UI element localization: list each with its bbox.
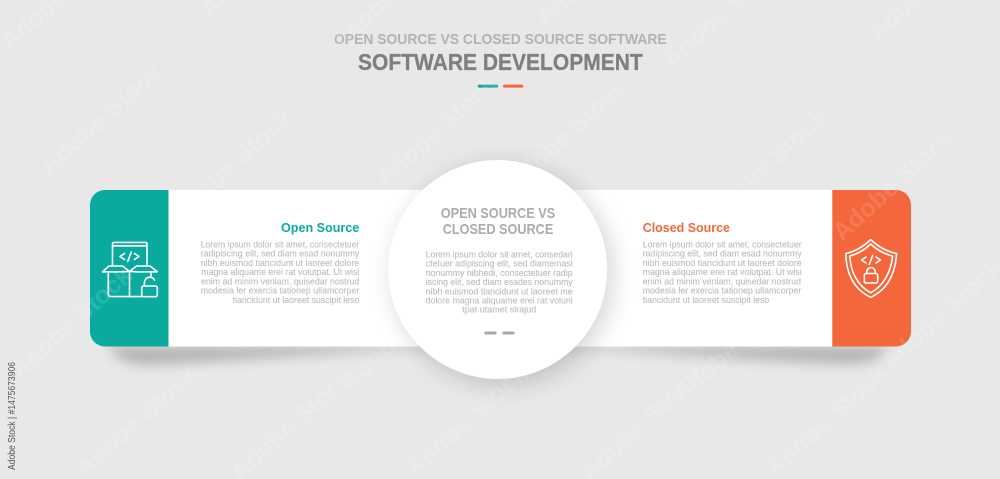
icon: shield with code and padlock: [846, 240, 897, 297]
watermark pattern: Adobe Stock: [700, 103, 833, 226]
body text: closed source: Lorem ipsum dolor sit amet, consectetuer: [643, 240, 802, 250]
body text: open source: magna aliquame erei rat volutpat. Ut wisi: [201, 267, 359, 277]
circle: [388, 160, 607, 379]
body text: center: ctetuer adipiscing elit, sed diamemasi: [426, 259, 573, 269]
body text: open source: [201, 240, 360, 305]
body text: closed source: magna aliquame erei rat volutpat. Ut wisi: [643, 267, 802, 277]
body text: closed source: radipiscing elit, sed diam esad nonummy: [643, 249, 802, 259]
body text: open source: enim ad minim veniam, quisedar nostrud: [201, 276, 359, 286]
watermark pattern: Adobe Stock: [207, 229, 340, 352]
main heading: SOFTWARE DEVELOPMENT: [358, 49, 643, 75]
watermark pattern: Adobe Stock: [5, 261, 138, 384]
heading: center: CLOSED SOURCE: [443, 221, 553, 238]
body text: open source: modesia ler exercia tationep ullamcorper: [201, 286, 359, 296]
watermark pattern: Adobe Stock: [760, 359, 893, 479]
body text: center: tpat utamet sirajud: [462, 305, 536, 315]
watermark pattern: Adobe Stock: [35, 57, 168, 180]
panel body: [160, 190, 840, 346]
stock reference label: Adobe Stock | #1475673906: [6, 362, 18, 470]
panel: open source text: [201, 220, 360, 305]
body text: closed source: nibh euismod tiancidunt ut laoreet dolore: [643, 258, 802, 268]
body text: closed source: tiancidunt ut laoreet suscipit leso: [643, 295, 769, 305]
watermark pattern: Adobe Stock: [400, 359, 533, 479]
orange side block: [832, 190, 911, 346]
icon: open box with code and unlocked padlock: [102, 242, 157, 297]
watermark pattern: Adobe Stock: [537, 236, 670, 359]
body text: center: [426, 250, 573, 315]
body text: center: dolore magna aliquame erei rat voluni: [426, 295, 573, 305]
body text: closed source: modesia ler exercia tationep ullamcorper: [643, 286, 801, 296]
teal side block: [90, 190, 168, 346]
subtitle: OPEN SOURCE VS CLOSED SOURCE SOFTWARE: [334, 31, 667, 48]
body text: open source: tiancidunt ut laoreet suscipit leso: [233, 295, 359, 305]
watermark pattern: Adobe Stock: [667, 285, 800, 408]
heading: center: OPEN SOURCE VS: [441, 205, 555, 222]
watermark pattern: Adobe Stock: [335, 273, 468, 396]
heading: closed source: Closed Source: [643, 220, 730, 235]
watermark pattern: Adobe Stock: [500, 73, 633, 196]
watermark pattern: Adobe Stock: [70, 359, 203, 479]
panel: comparison band: [90, 190, 911, 346]
heading: center: [441, 205, 555, 238]
title block: [334, 31, 667, 88]
dash marker: left: [484, 332, 497, 334]
heading: open source: Open Source: [281, 220, 359, 235]
body text: closed source: enim ad minim veniam, quisedar nostrud: [643, 276, 801, 286]
body text: center: nonummy nibhedi, consectetuer radip: [426, 268, 573, 278]
panel: center circle: [388, 160, 607, 379]
watermark pattern: Adobe Stock: [165, 103, 298, 226]
body text: center: Lorem ipsum dolor sit amet, consedari: [426, 250, 573, 260]
circle shadow: [393, 165, 613, 385]
watermark pattern: Adobe Stock: [827, 123, 960, 246]
body text: open source: nibh euismod tiancidunt ut laoreet dolore: [201, 258, 359, 268]
accent bar: teal: [478, 85, 498, 88]
panel: closed source text: [643, 220, 802, 305]
accent bar: orange: [503, 85, 523, 88]
body text: center: nibh euismod tiancidunt ut laoreet me: [426, 286, 573, 296]
dash marker: right: [502, 332, 515, 334]
panel shadow: [108, 346, 888, 365]
watermark pattern: Adobe Stock: [370, 69, 503, 192]
body text: open source: Lorem ipsum dolor sit amet, consectetuer: [201, 240, 359, 250]
body text: open source: radipiscing elit, sed diam esad nonummy: [201, 249, 360, 259]
body text: center: iscing elit, sed diam esades nonummy: [426, 277, 573, 287]
body text: closed source: [643, 240, 802, 305]
